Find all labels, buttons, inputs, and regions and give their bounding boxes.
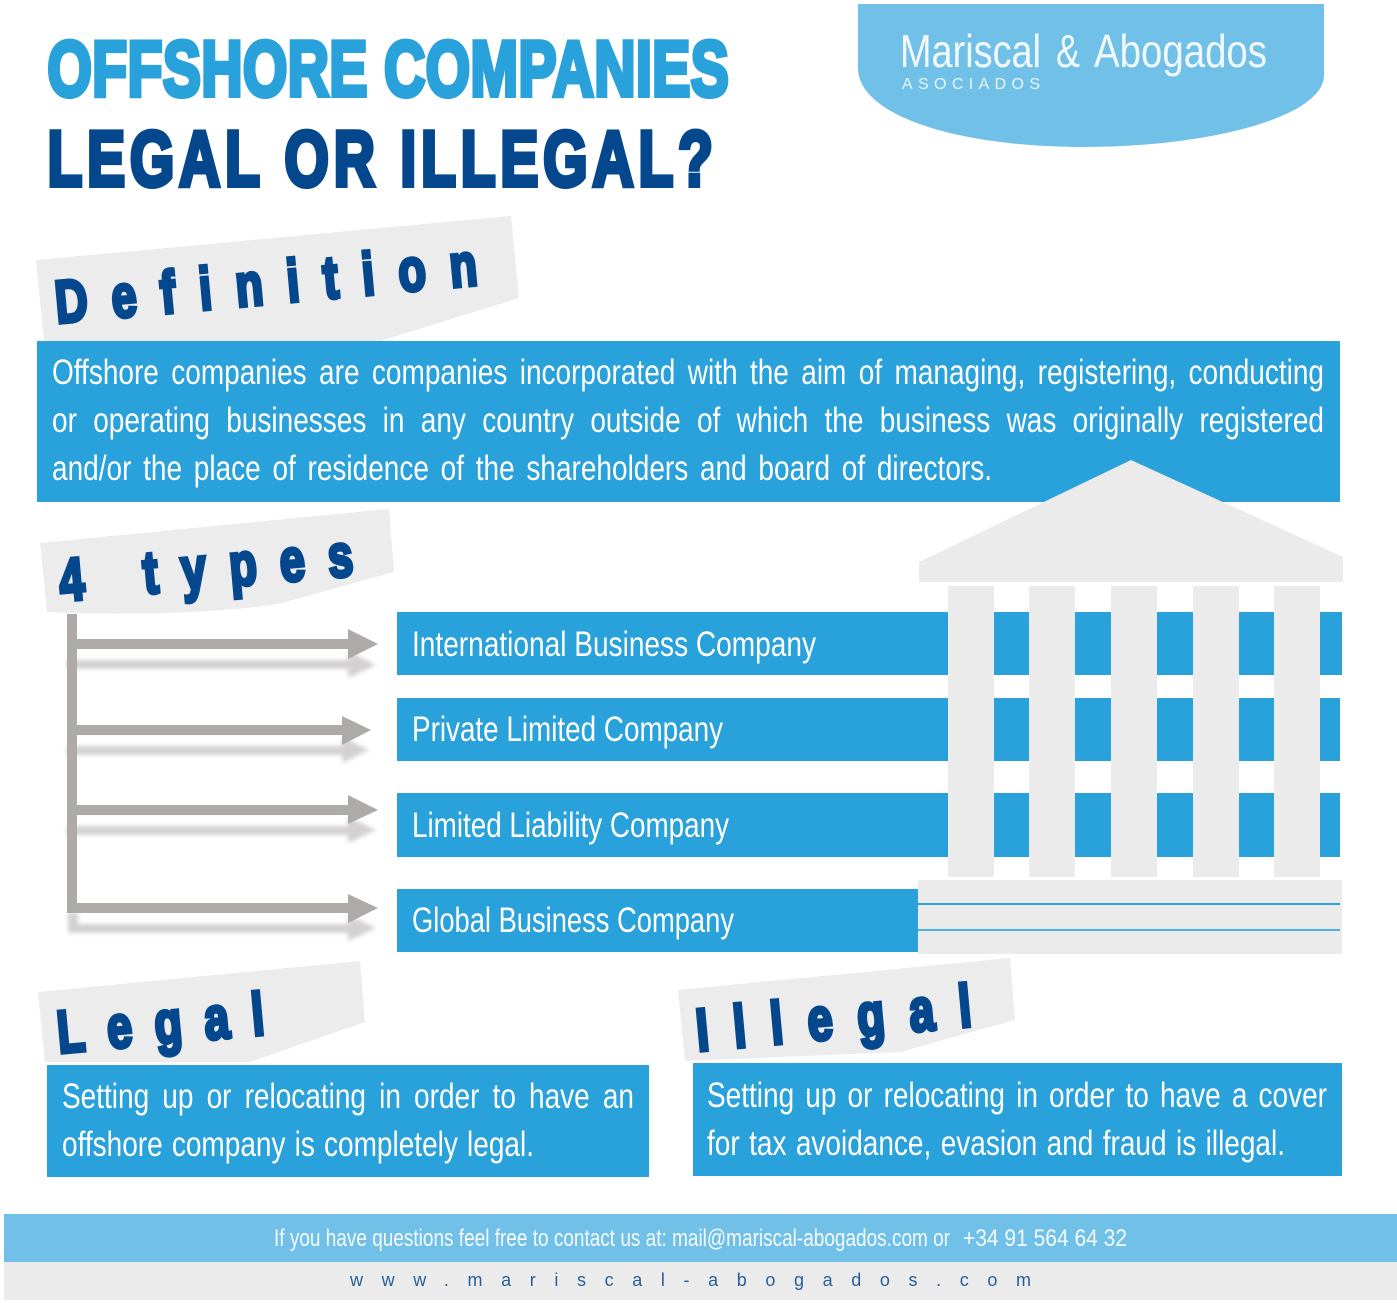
footer website band: [4, 1262, 1397, 1300]
type bar 2: Private Limited Company: [412, 710, 723, 749]
footer contact band: [4, 1214, 1397, 1262]
illegal text: [707, 1074, 1327, 1168]
definition text: and/or the place of residence of the shareholders and board of directors.: [52, 449, 992, 488]
logo panel: [858, 4, 1324, 147]
arrow 2: [67, 716, 371, 745]
building base: [918, 880, 1342, 954]
legal text: Setting up or relocating in order to have an: [62, 1077, 634, 1116]
illegal text: Setting up or relocating in order to have a cover: [707, 1076, 1327, 1115]
arrow 4: [67, 894, 378, 923]
type bar 1: [397, 612, 1342, 675]
illegal text: for tax avoidance, evasion and fraud is illegal.: [707, 1124, 1285, 1163]
pediment: [919, 460, 1343, 582]
footer website band: www.mariscal-abogados.com: [349, 1270, 1031, 1290]
title: [48, 26, 729, 203]
type bar 3: Limited Liability Company: [412, 806, 729, 845]
type bar 3: [397, 793, 1340, 857]
title: OFFSHORE COMPANIES: [48, 26, 729, 113]
heading tag: definition: Definition: [52, 229, 504, 337]
legal text: [62, 1075, 634, 1169]
heading tag: legal: Legal: [54, 979, 289, 1067]
arrow tree: [67, 614, 378, 941]
panel: definition: [37, 341, 1340, 502]
icon: classical building: [918, 460, 1343, 954]
vertical stem: [67, 614, 77, 913]
subtitle: LEGAL OR ILLEGAL?: [48, 116, 718, 203]
legal text: offshore company is completely legal.: [62, 1125, 534, 1164]
footer contact band: +34 91 564 64 32: [963, 1225, 1127, 1252]
arrow 1: [67, 629, 378, 659]
panel: illegal: [693, 1063, 1342, 1176]
type bar 4: Global Business Company: [412, 901, 734, 940]
type bar 1: International Business Company: [412, 625, 816, 664]
heading tag: 4 types: 4 types: [56, 520, 379, 615]
panel: legal: [47, 1065, 649, 1177]
logo name: &: [1056, 25, 1080, 77]
footer contact band: If you have questions feel free to contact us at: mail@mariscal-abogados.com or: [274, 1225, 950, 1252]
arrow shadows: [67, 651, 376, 941]
heading tag: legal: [38, 961, 365, 1067]
heading tag: illegal: Illegal: [693, 971, 999, 1065]
logo name: [900, 25, 1267, 77]
type bar 2: [397, 698, 1340, 761]
logo subtitle: ASOCIADOS: [902, 76, 1040, 93]
type bar 4: [397, 889, 919, 952]
definition text: [52, 351, 1324, 493]
logo name: Mariscal: [900, 25, 1041, 77]
definition text: or operating businesses in any country outside of which the business was originally registered: [52, 401, 1324, 440]
definition text: Offshore companies are companies incorporated with the aim of managing, registering, conducting: [52, 353, 1324, 392]
logo name: Abogados: [1094, 25, 1267, 77]
arrow 3: [67, 795, 378, 824]
columns: [948, 586, 1320, 877]
